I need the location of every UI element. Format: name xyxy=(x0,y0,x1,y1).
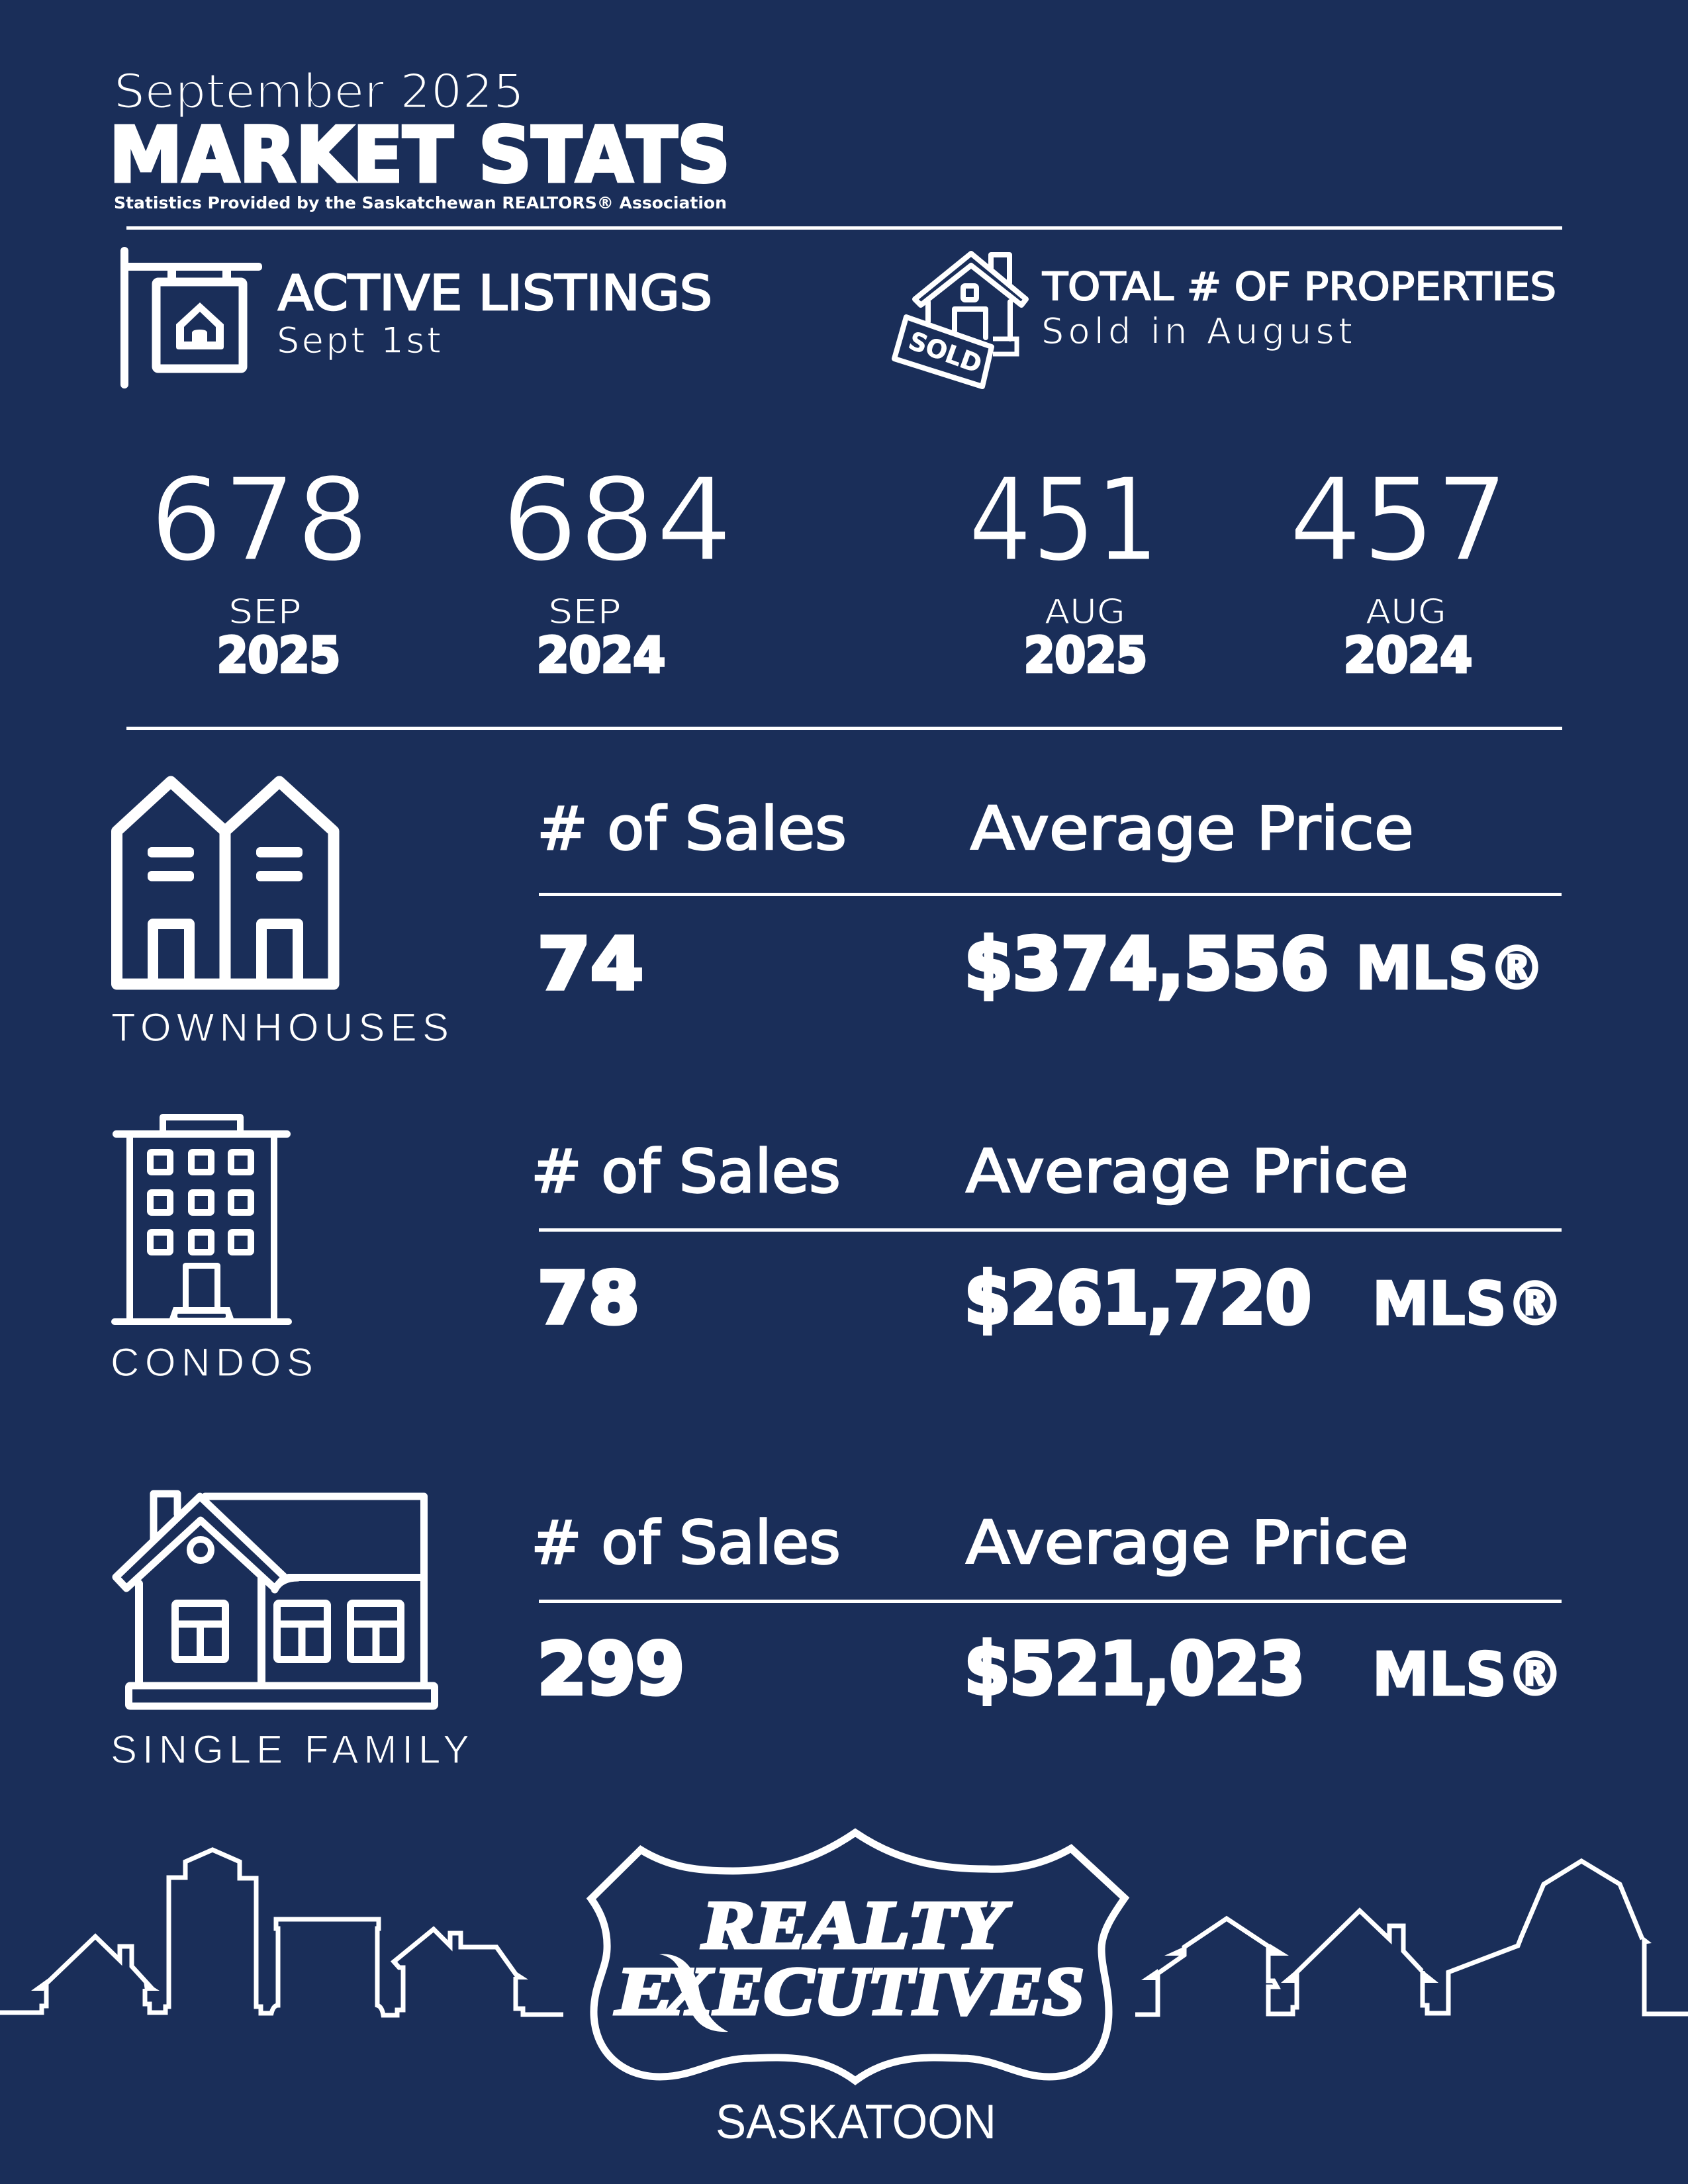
label: MLS: MLS® xyxy=(1356,934,1545,1003)
stat: 684 active listings Sep 2024 xyxy=(501,453,733,684)
label: single family: SINGLE FAMILY xyxy=(111,1727,469,1772)
source note: Statistics Provided by the Saskatchewan REALTORS® Association xyxy=(114,193,727,212)
heading: total properties: TOTAL # OF PROPERTIES xyxy=(1042,264,1556,309)
logo word: saskatoon: SASKATOON xyxy=(716,2095,996,2149)
stat: 451 sold Aug 2025: AUG xyxy=(1045,592,1125,632)
header xyxy=(109,64,730,212)
stat: 457 sold Aug 2024 xyxy=(1289,453,1509,684)
panel: townhouses xyxy=(111,782,1562,1050)
icon: sold house xyxy=(894,253,1026,387)
value: sales count: 78 xyxy=(538,1257,639,1340)
stat: 678 active listings Sep 2025 xyxy=(150,453,369,684)
stat: 684 active listings Sep 2024: SEP xyxy=(548,592,621,632)
label: MLS: MLS® xyxy=(1372,1640,1564,1709)
stat: 457 sold Aug 2024: 457 xyxy=(1289,453,1509,588)
value: average price: $374,556 xyxy=(964,923,1329,1006)
value: average price: $261,720 xyxy=(964,1257,1311,1340)
sold label: SOLD xyxy=(905,326,986,379)
label: townhouses: TOWNHOUSES xyxy=(111,1005,449,1050)
skyline: left xyxy=(0,1850,563,2015)
title: MARKET STATS xyxy=(109,111,730,200)
icon: condo building xyxy=(111,1117,292,1325)
logo: Realty Executives Saskatoon xyxy=(591,1833,1125,2149)
label: condos: CONDOS xyxy=(111,1340,313,1385)
logo shield xyxy=(591,1833,1125,2081)
icon: single family house xyxy=(116,1494,434,1706)
icon: townhouses xyxy=(117,782,334,984)
stat: 678 active listings Sep 2025: 678 xyxy=(150,453,369,588)
stat: 451 sold Aug 2025 xyxy=(968,453,1159,684)
icon: hanging listing sign xyxy=(120,247,262,388)
date heading: September 2025 xyxy=(114,64,524,119)
column heading: price: Average Price xyxy=(966,1508,1409,1578)
logo word: executives: X xyxy=(661,1954,714,2029)
stat: 678 active listings Sep 2025: 2025 xyxy=(217,627,340,684)
label: MLS: MLS® xyxy=(1372,1269,1564,1339)
logo word: executives xyxy=(615,1954,1084,2032)
column heading: sales: # of Sales xyxy=(537,794,847,864)
panel: single family xyxy=(111,1494,1564,1772)
stat: 684 active listings Sep 2024: 684 xyxy=(501,453,733,588)
column heading: sales: # of Sales xyxy=(531,1508,841,1578)
stat: 457 sold Aug 2024: AUG xyxy=(1366,592,1446,632)
stat: 451 sold Aug 2025: 451 xyxy=(968,453,1159,588)
logo word: realty: REALTY xyxy=(701,1888,1011,1963)
subheading: sept 1st: Sept 1st xyxy=(277,320,441,361)
logo word: executives: ECUTIVES xyxy=(713,1954,1084,2029)
value: average price: $521,023 xyxy=(964,1628,1305,1711)
value: sales count: 74 xyxy=(538,923,643,1006)
stat: 451 sold Aug 2025: 2025 xyxy=(1024,627,1147,684)
column heading: sales: # of Sales xyxy=(531,1137,841,1206)
stat: 684 active listings Sep 2024: 2024 xyxy=(537,627,665,684)
panel: active listings header xyxy=(120,247,712,388)
column heading: price: Average Price xyxy=(966,1137,1409,1206)
subheading: sold in august: Sold in August xyxy=(1041,310,1352,352)
value: sales count: 299 xyxy=(538,1628,684,1711)
skyline: right xyxy=(1135,1861,1688,2015)
panel: condos xyxy=(111,1117,1564,1385)
logo word: executives: E xyxy=(615,1954,674,2029)
column heading: price: Average Price xyxy=(970,794,1414,864)
heading: active listings: ACTIVE LISTINGS xyxy=(278,265,712,322)
stat: 678 active listings Sep 2025: SEP xyxy=(228,592,301,632)
panel: properties sold header xyxy=(894,253,1556,387)
stat: 457 sold Aug 2024: 2024 xyxy=(1344,627,1472,684)
